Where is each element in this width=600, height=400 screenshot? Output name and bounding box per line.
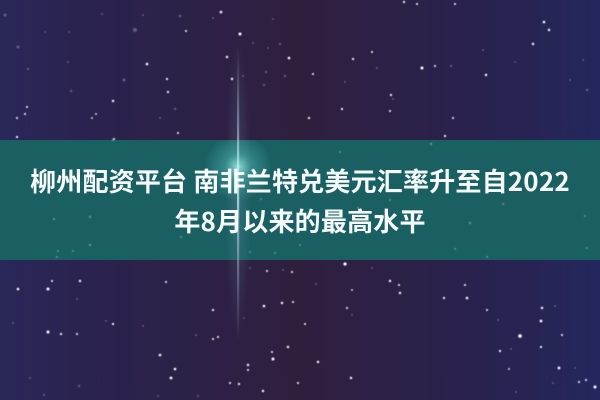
teal band (0, 140, 600, 260)
title (30, 162, 570, 239)
light beam (208, 54, 268, 333)
title: 年8月以来的最高水平 (174, 202, 426, 239)
title: 柳州配资平台 南非兰特兑美元汇率升至自2022 (30, 162, 570, 199)
stars inside band (53, 139, 588, 258)
